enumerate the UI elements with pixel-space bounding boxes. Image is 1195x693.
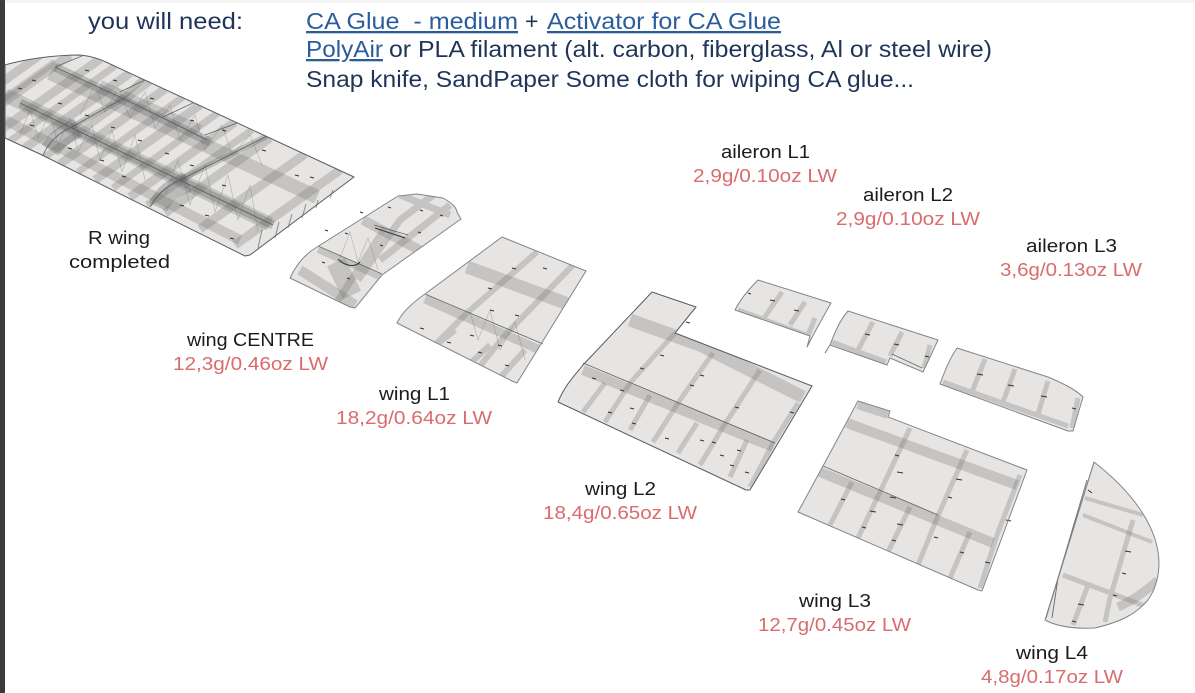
text block: materials list: CA Glue - medium [306,8,518,34]
wing part: aileron L3 [940,348,1083,431]
wing part: wing L3 [798,401,1027,591]
label: wing L4: wing L4 [1015,642,1088,663]
wing part: wing L1 [397,237,590,383]
text block: materials list: Snap knife, SandPaper Some cloth for wiping CA glue... [306,66,914,92]
heading: you will need: you will need: [88,8,243,34]
label: wing L1: wing L1 [378,383,450,404]
wing part: wing L4 [1045,462,1159,628]
wing part: wing L2 [558,292,812,490]
label: wing L1 weight: 18,2g/0.64oz LW [336,407,493,428]
label: wing CENTRE weight: 12,3g/0.46oz LW [173,353,329,374]
wing part: aileron L2 [825,311,938,372]
wing part: aileron L1 [735,280,831,347]
label: aileron L1: aileron L1 [721,141,810,162]
label: wing L4 weight: 4,8g/0.17oz LW [981,666,1124,687]
label: wing L3 weight: 12,7g/0.45oz LW [758,614,912,635]
label: aileron L2 weight: 2,9g/0.10oz LW [836,208,981,229]
label: aileron L3 weight: 3,6g/0.13oz LW [1000,259,1143,280]
text block: materials list [306,8,992,92]
text block: materials list: + [525,8,538,34]
wing part: R wing completed [0,55,354,256]
label: wing L2 weight: 18,4g/0.65oz LW [543,502,698,523]
text block: materials list: Activator for CA Glue [547,8,781,34]
text block: materials list: PolyAir [306,36,383,62]
wing part: wing centre [290,190,461,308]
label: wing L2: wing L2 [584,478,656,499]
label: R wing: R wing [88,227,150,248]
label: wing CENTRE: wing CENTRE [186,329,314,350]
label: completed: completed [69,251,170,272]
text block: materials list: or PLA filament (alt. carbon, fiberglass, Al or steel wire) [389,36,992,62]
label: aileron L1 weight: 2,9g/0.10oz LW [693,165,838,186]
label: aileron L3: aileron L3 [1026,235,1117,256]
label: aileron L2: aileron L2 [863,184,953,205]
label: wing L3: wing L3 [798,590,871,611]
